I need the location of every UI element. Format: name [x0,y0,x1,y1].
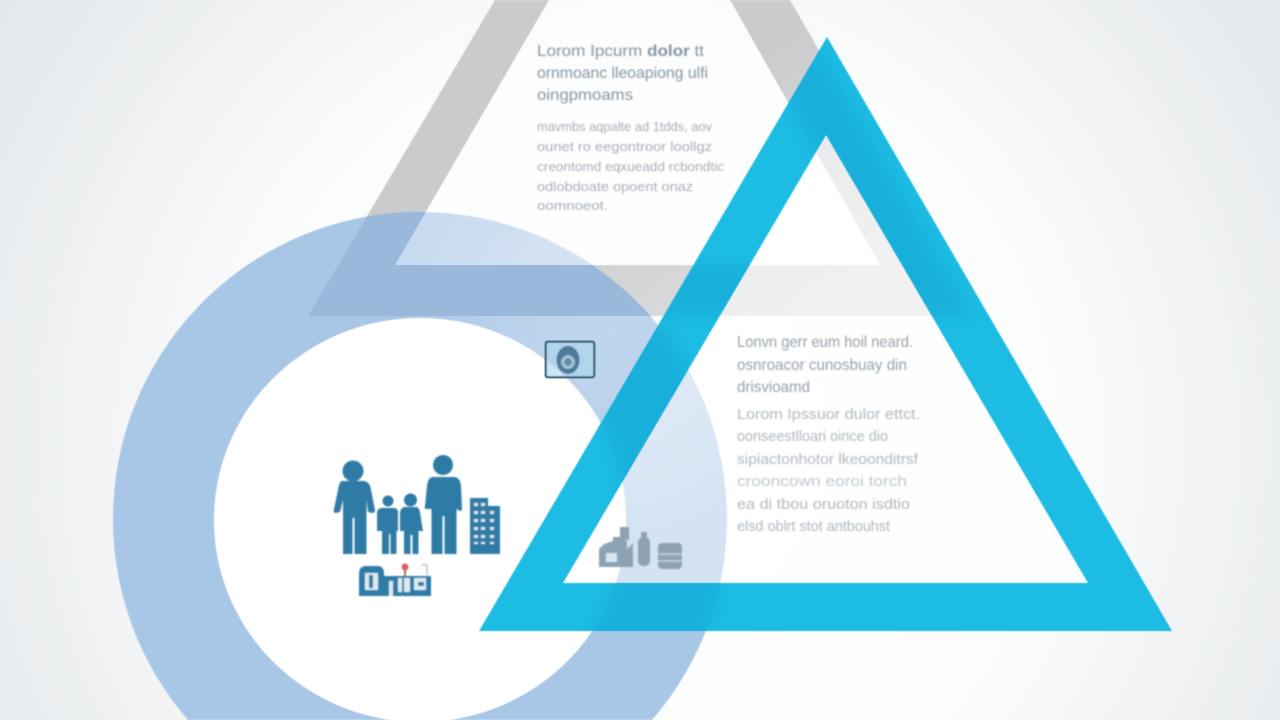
upper body text: odlobdoate opoent onaz [537,179,693,194]
upper heading: oingpmoams [537,87,633,104]
lower body text: sipiactonhotor lkeoonditrsf [737,451,919,468]
upper heading [537,43,708,104]
adult left [334,460,375,554]
text block: blue triangle [737,334,920,535]
lower body text: Lorom Ipssuor dulor ettct. [737,406,920,423]
lower heading: drisvioamd [737,379,810,396]
upper body text [537,119,725,213]
upper body text: creontomd eqxueadd rcbondtic [537,159,725,174]
lower body text: ea di tbou oruoton isdtio [737,496,910,513]
lower heading: osnroacor cunosbuay din [737,357,907,374]
circle ring [113,212,727,720]
ring and gray overlap [308,212,650,316]
lower heading [737,334,913,396]
icon: office building [470,498,500,554]
upper body text: ounet ro eegontroor loollgz [537,139,712,154]
lower body text: oonseestlloari oince dio [737,428,888,445]
adult right [425,455,462,554]
child right [400,494,423,554]
text block: upper triangle [537,43,725,213]
upper heading: Lorom Ipcurm dolor tt [537,43,705,60]
gray triangle [308,0,972,316]
upper body text: mavmbs aqpalte ad 1tdds, aov [537,119,712,134]
child left [377,496,398,554]
icon: faded storage and bottles [599,527,682,569]
blue triangle [478,36,1172,632]
icon: small town strip [359,564,431,596]
lower body text: elsd oblrt stot antbouhst [737,518,891,535]
lower body text [737,406,920,535]
lower heading: Lonvn gerr eum hoil neard. [737,334,913,351]
upper body text: oomnoeot. [537,198,608,213]
icon: family of four [334,455,462,554]
icon: camera frame [546,342,594,378]
lower body text: crooncown eoroi torch [737,473,907,490]
upper heading: ornmoanc lleoapiong ulfi [537,65,708,82]
gray triangle interior [395,0,880,265]
